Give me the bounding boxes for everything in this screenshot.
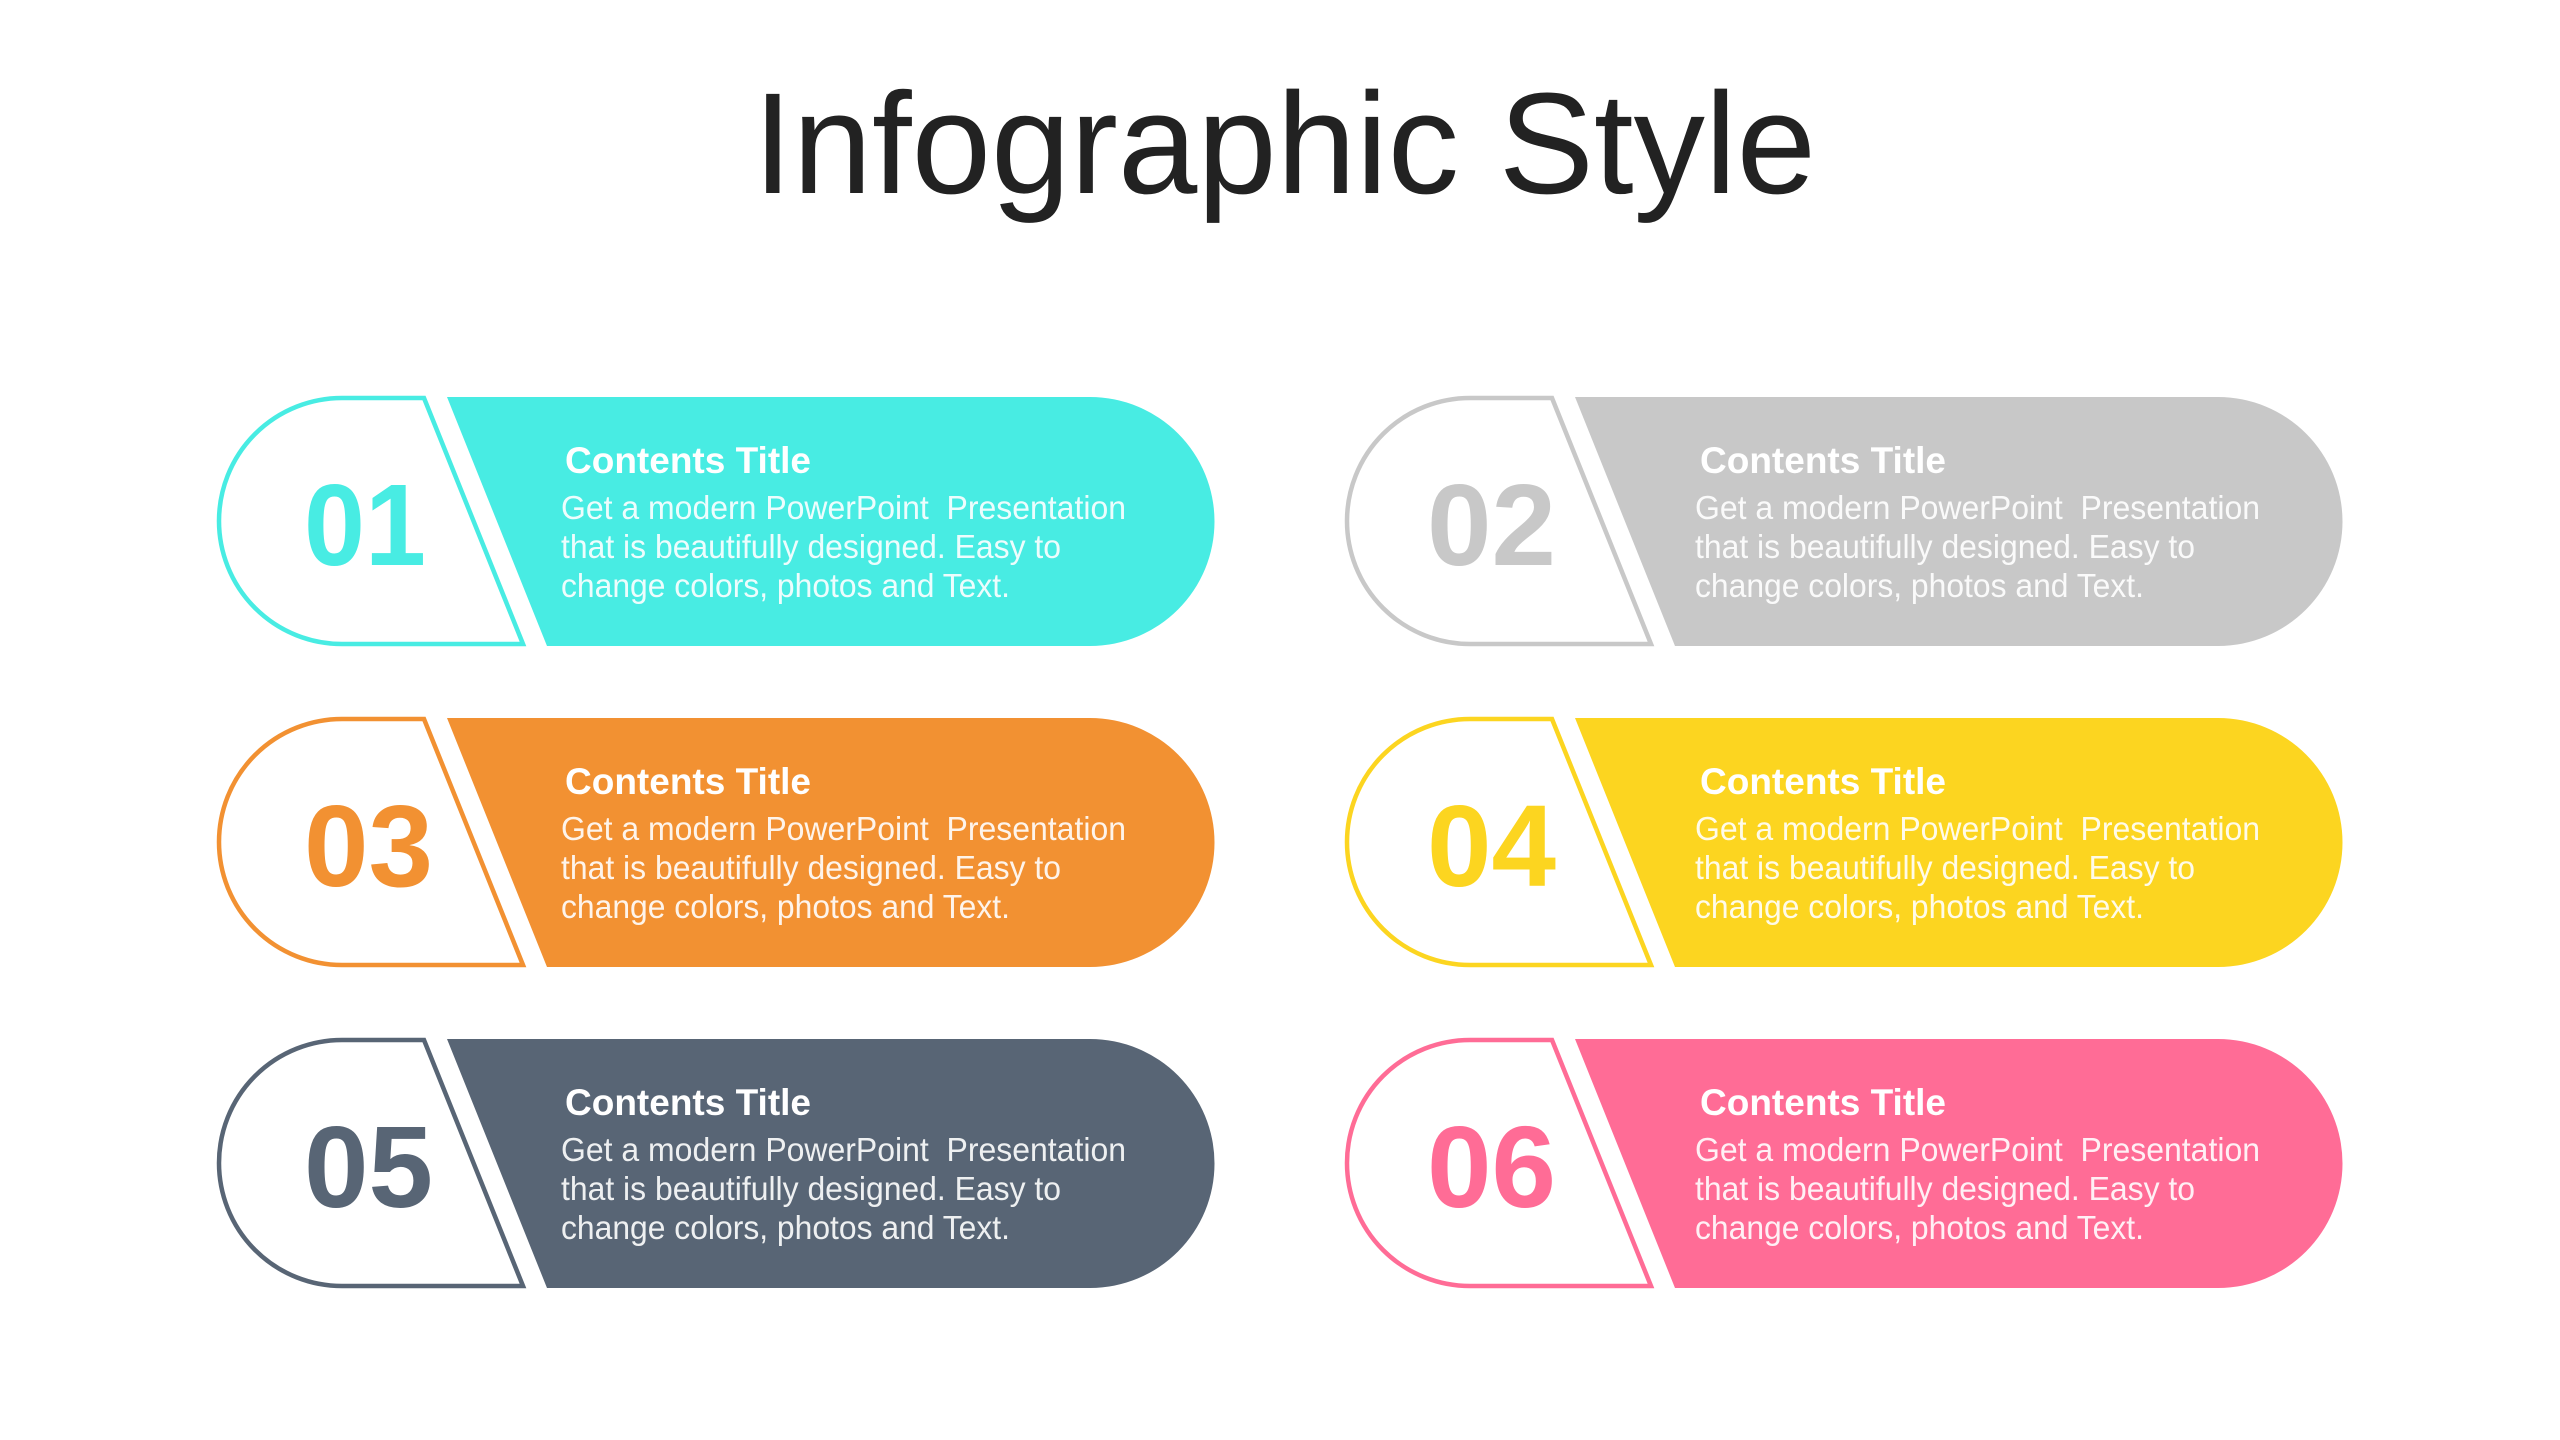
body text 04: change colors, photos and Text. <box>1695 889 2144 926</box>
body text 04: Get a modern PowerPoint Presentation <box>1695 811 2260 848</box>
colour pill 04 <box>1575 718 2342 967</box>
body text 02 <box>1695 490 2260 605</box>
body text 03: Get a modern PowerPoint Presentation <box>561 811 1126 848</box>
panel: item 01 <box>219 397 1214 646</box>
body text 05 <box>561 1132 1126 1247</box>
panel: item 04 <box>1347 718 2342 967</box>
number 06: 06 <box>1427 1102 1556 1232</box>
body text 05: change colors, photos and Text. <box>561 1210 1010 1247</box>
body text 03 <box>561 811 1126 926</box>
body text 03: that is beautifully designed. Easy to <box>561 850 1061 887</box>
body text 04 <box>1695 811 2260 926</box>
number 03: 03 <box>304 781 433 911</box>
number 02: 02 <box>1427 460 1556 590</box>
heading 06: Contents Title <box>1700 1082 1946 1123</box>
panel: item 02 <box>1347 397 2342 646</box>
heading 01: Contents Title <box>565 440 811 481</box>
number 05: 05 <box>304 1102 433 1232</box>
body text 02: that is beautifully designed. Easy to <box>1695 529 2195 566</box>
number 04: 04 <box>1427 781 1556 911</box>
number outline shape 03 <box>219 719 523 965</box>
panel: item 06 <box>1347 1039 2342 1288</box>
heading 02: Contents Title <box>1700 440 1946 481</box>
body text 01: change colors, photos and Text. <box>561 568 1010 605</box>
body text 06: change colors, photos and Text. <box>1695 1210 2144 1247</box>
number outline shape 06 <box>1347 1040 1651 1286</box>
colour pill 01 <box>447 397 1214 646</box>
body text 05: that is beautifully designed. Easy to <box>561 1171 1061 1208</box>
body text 04: that is beautifully designed. Easy to <box>1695 850 2195 887</box>
body text 02: Get a modern PowerPoint Presentation <box>1695 490 2260 527</box>
panel: item 03 <box>219 718 1214 967</box>
number outline shape 02 <box>1347 398 1651 644</box>
colour pill 02 <box>1575 397 2342 646</box>
number 01: 01 <box>304 460 426 590</box>
body text 01: Get a modern PowerPoint Presentation <box>561 490 1126 527</box>
body text 06 <box>1695 1132 2260 1247</box>
colour pill 06 <box>1575 1039 2342 1288</box>
panel: item 05 <box>219 1039 1214 1288</box>
colour pill 03 <box>447 718 1214 967</box>
body text 01 <box>561 490 1126 605</box>
body text 06: Get a modern PowerPoint Presentation <box>1695 1132 2260 1169</box>
heading 03: Contents Title <box>565 761 811 802</box>
body text 05: Get a modern PowerPoint Presentation <box>561 1132 1126 1169</box>
title: Infographic Style <box>753 63 1816 224</box>
heading 04: Contents Title <box>1700 761 1946 802</box>
colour pill 05 <box>447 1039 1214 1288</box>
body text 06: that is beautifully designed. Easy to <box>1695 1171 2195 1208</box>
body text 02: change colors, photos and Text. <box>1695 568 2144 605</box>
number outline shape 04 <box>1347 719 1651 965</box>
body text 03: change colors, photos and Text. <box>561 889 1010 926</box>
body text 01: that is beautifully designed. Easy to <box>561 529 1061 566</box>
number outline shape 01 <box>219 398 523 644</box>
number outline shape 05 <box>219 1040 523 1286</box>
heading 05: Contents Title <box>565 1082 811 1123</box>
